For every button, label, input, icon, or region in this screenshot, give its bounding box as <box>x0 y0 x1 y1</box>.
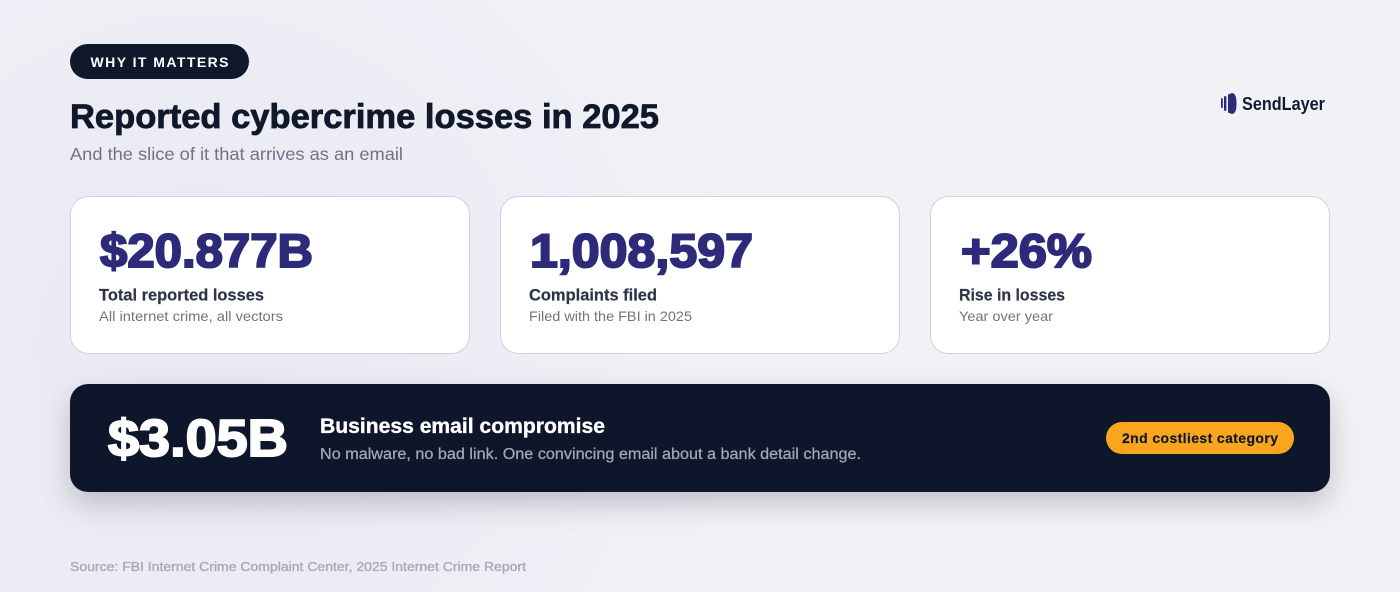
icon: logo bars <box>1221 93 1236 114</box>
label: total losses: Total reported losses <box>99 286 264 304</box>
stat: BEC losses: $3.05B <box>108 410 288 468</box>
banner text: No malware, no bad link. One convincing email about a bank detail change. <box>320 446 861 463</box>
stat: complaints: 1,008,597 <box>530 224 753 277</box>
note: rise: Year over year <box>959 308 1053 324</box>
note: complaints: Filed with the FBI in 2025 <box>529 308 692 324</box>
stat: total losses: $20.877B <box>100 224 313 277</box>
source note: Source: FBI Internet Crime Complaint Center, 2025 Internet Crime Report <box>70 559 526 574</box>
panel: total reported losses <box>70 196 470 354</box>
badge: 2nd costliest category <box>1106 422 1294 454</box>
panel: business email compromise banner <box>70 384 1330 492</box>
stat: rise: +26% <box>961 224 1092 277</box>
eyebrow pill <box>70 44 249 79</box>
subtitle: And the slice of it that arrives as an email <box>70 144 403 164</box>
logo: SendLayer <box>1221 93 1325 114</box>
label: complaints: Complaints filed <box>529 286 657 304</box>
panel: complaints filed <box>500 196 900 354</box>
badge: 2nd costliest category: 2nd costliest category <box>1122 430 1278 446</box>
panel: rise in losses <box>930 196 1330 354</box>
title: Reported cybercrime losses in 2025 <box>70 98 659 136</box>
label: rise: Rise in losses <box>959 286 1065 304</box>
banner heading: Business email compromise <box>320 415 605 438</box>
logo wordmark: SendLayer <box>1242 93 1325 114</box>
note: total losses: All internet crime, all vectors <box>99 308 283 324</box>
eyebrow pill: WHY IT MATTERS <box>90 54 228 70</box>
